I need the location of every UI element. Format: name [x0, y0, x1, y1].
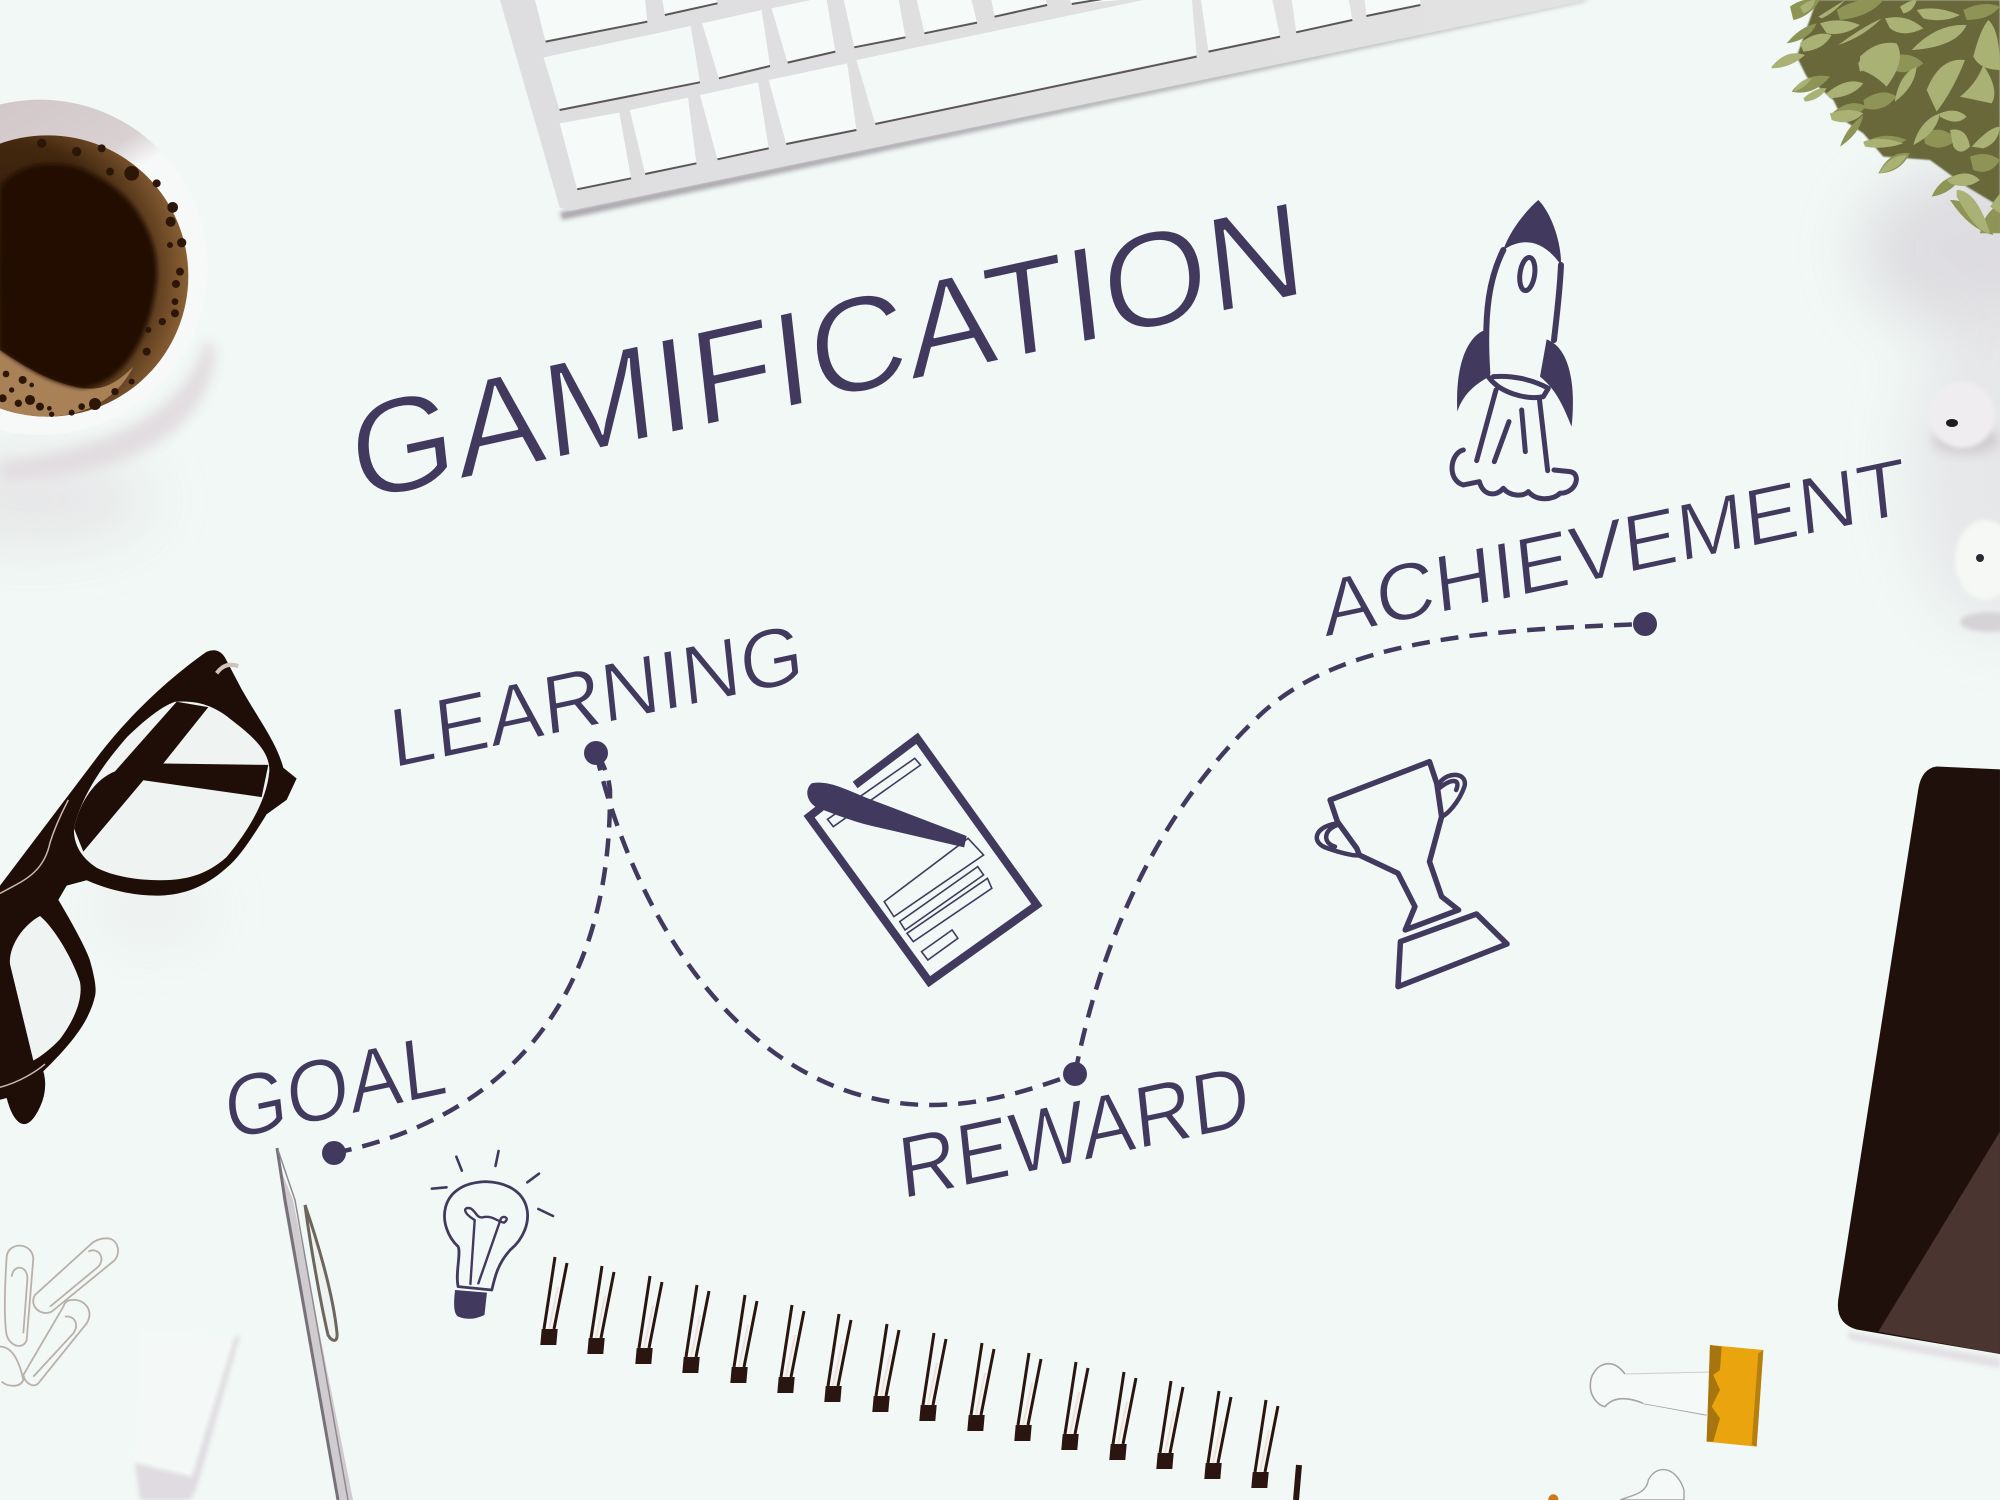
plant	[1772, 0, 2000, 235]
waypoint dots	[322, 612, 1657, 1165]
second binder clip	[1548, 1470, 1684, 1500]
notebook spiral binding	[540, 1257, 1299, 1500]
binder clip	[1590, 1345, 1763, 1447]
eraser	[135, 1330, 240, 1500]
glasses	[0, 650, 297, 1124]
smartphone	[1838, 767, 2000, 1368]
coffee foam	[0, 135, 188, 417]
coffee dark centre	[0, 164, 157, 388]
cup rim	[0, 100, 208, 435]
paper clips	[0, 1238, 118, 1386]
title: GAMIFICATION	[342, 172, 1311, 531]
coffee cup	[0, 100, 216, 480]
pen	[277, 1148, 353, 1500]
icon: trophy	[1317, 762, 1507, 987]
dashed journey path	[334, 624, 1645, 1153]
keyboard	[500, 0, 1590, 220]
soft desk shadows	[0, 160, 2000, 930]
label: goal: GOAL	[220, 1015, 451, 1159]
cup shadow	[0, 340, 216, 480]
label: achievement: ACHIEVEMENT	[1317, 440, 1911, 654]
keyboard body and keys	[500, 0, 1580, 211]
icon: rocket	[1452, 200, 1576, 499]
icon: clipboard with pen	[807, 738, 1037, 982]
foam bubbles	[0, 139, 186, 417]
label: learning: LEARNING	[385, 605, 808, 786]
earbuds	[1929, 382, 2000, 632]
icon: light bulb	[432, 1151, 553, 1319]
label: reward: REWARD	[894, 1047, 1254, 1218]
keyboard drop shadow	[560, 0, 1590, 220]
